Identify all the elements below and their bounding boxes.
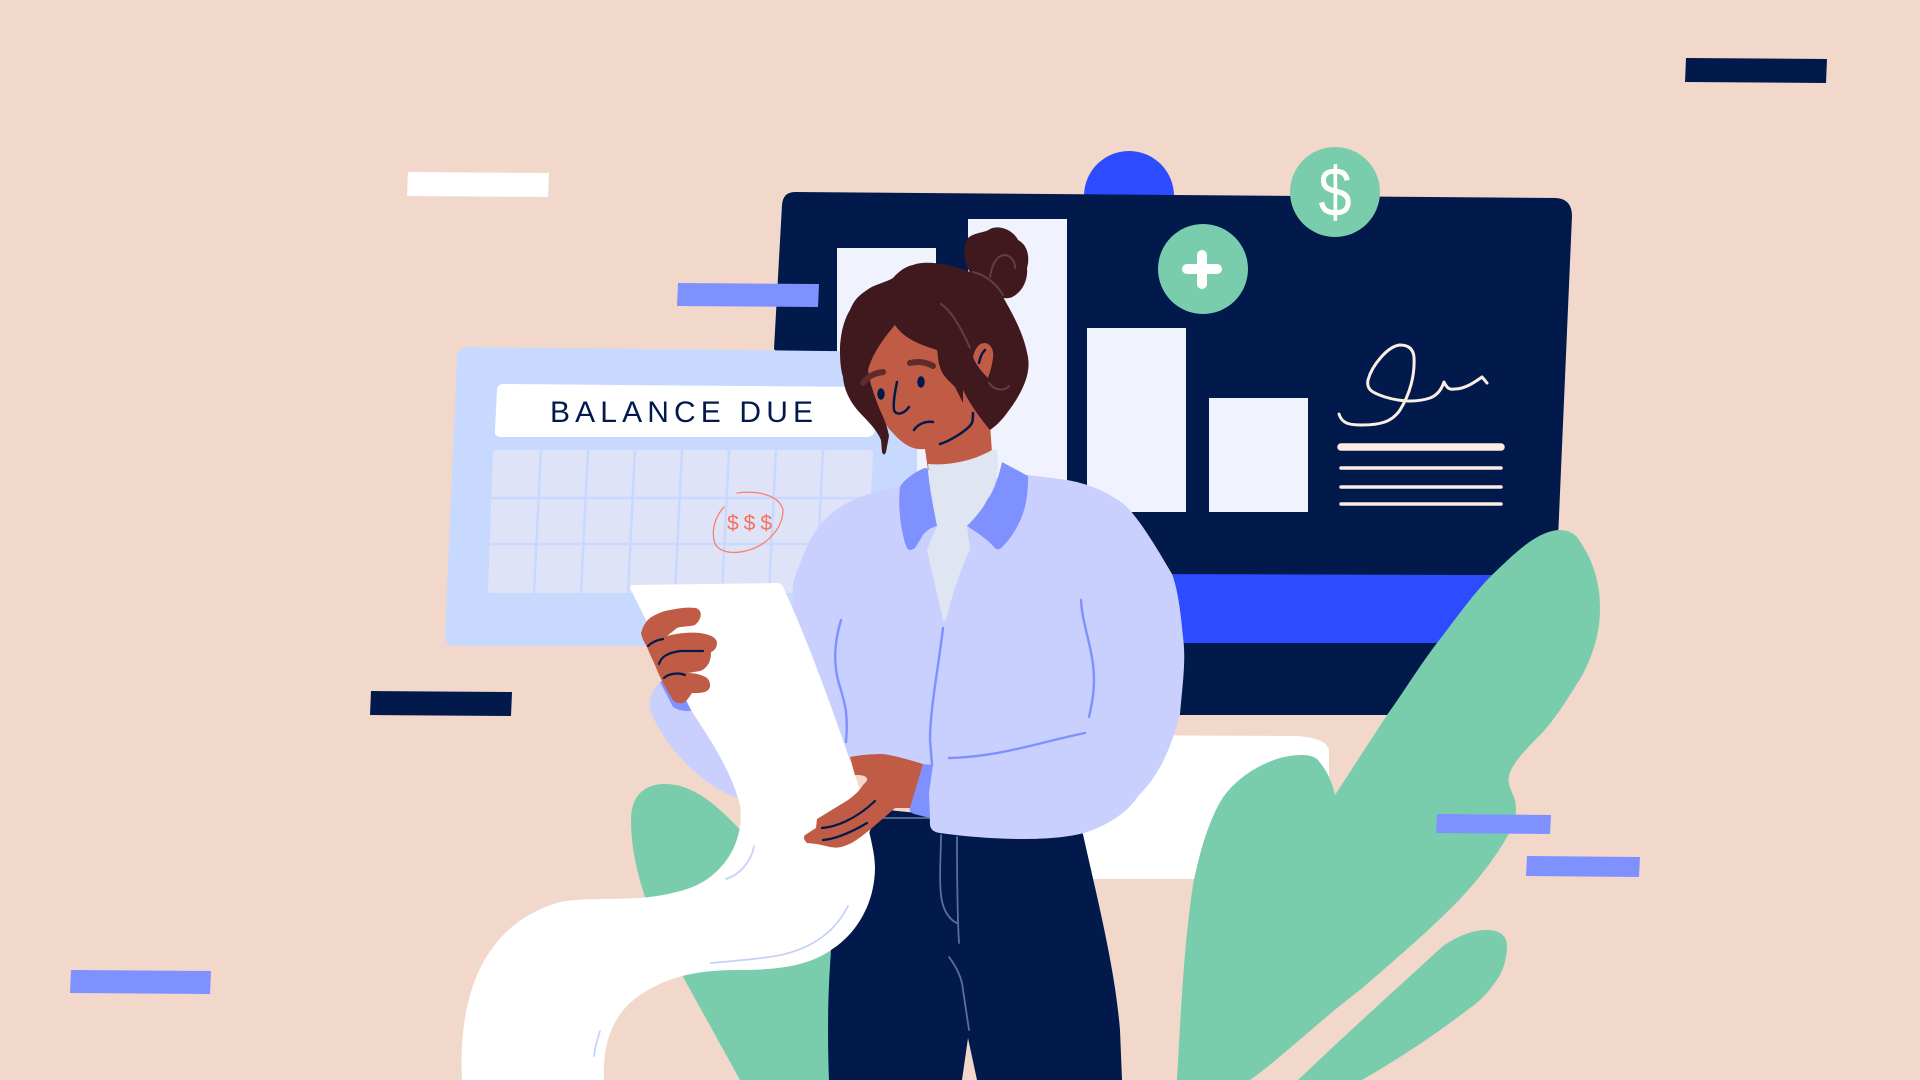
floating bar: top right navy: [1685, 58, 1827, 83]
heading bar: [495, 384, 878, 437]
left hand: [641, 608, 717, 703]
right hand: [804, 754, 923, 848]
collar right: [967, 462, 1028, 549]
jeans: [828, 810, 1122, 1080]
right cuff: [910, 764, 933, 818]
face features: [863, 350, 985, 444]
shirt body: [790, 475, 1184, 839]
bar chart: [837, 219, 1308, 512]
right plant small leaf: [1298, 930, 1507, 1080]
hair highlights: [941, 255, 1015, 390]
circled amount: [713, 492, 783, 552]
blue semicircle behind monitor: [1084, 151, 1174, 241]
icon: dollar badge: $: [1318, 152, 1352, 231]
monitor stand: [1050, 735, 1329, 879]
icon: dollar badge: [1290, 147, 1380, 237]
hair: [840, 227, 1029, 454]
turtleneck: [927, 450, 998, 621]
floating bar: white: [407, 172, 549, 197]
heading: balance due: BALANCE DUE: [550, 396, 813, 429]
ear: [973, 343, 993, 378]
floating bar: periwinkle on leaf lower: [1526, 856, 1640, 877]
floating bar: periwinkle bottom left: [70, 970, 211, 994]
signature lines: [1341, 447, 1501, 504]
collar left: [899, 468, 937, 550]
person: [650, 227, 1184, 1080]
left cuff: [660, 680, 695, 711]
floating bar: periwinkle on monitor: [677, 283, 819, 307]
calendar background: [445, 347, 917, 646]
signature: [1339, 345, 1487, 425]
neck and face skin: [866, 325, 992, 471]
monitor: [774, 192, 1572, 715]
calendar panel: [445, 347, 917, 646]
right plant big leaf: [1177, 530, 1600, 1080]
floating bar: periwinkle on leaf upper: [1436, 814, 1551, 834]
hair mass: [840, 263, 1029, 454]
receipt paper: [462, 583, 875, 1080]
hair bun: [964, 227, 1028, 298]
left plant leaf: [631, 784, 840, 1080]
blue band: [1150, 574, 1495, 643]
shirt sleeve left: [650, 680, 760, 797]
icon: plus badge: [1158, 224, 1248, 314]
circled amount: $$$: [727, 512, 777, 535]
calendar grid: [488, 450, 873, 593]
floating bar: navy left: [370, 691, 512, 716]
monitor body: [774, 192, 1572, 715]
